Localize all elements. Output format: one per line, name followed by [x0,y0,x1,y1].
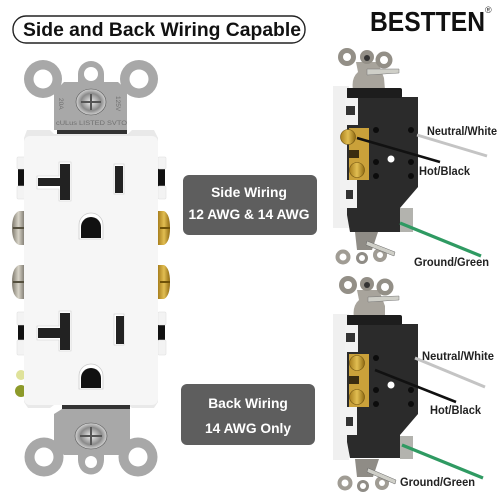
black body [340,315,418,458]
hot wire [375,370,456,402]
label: side wiring: 12 AWG & 14 AWG [189,207,309,222]
label: hot: Hot/Black [430,405,482,417]
brand logo: BESTTEN [370,6,485,37]
top mounting strap [24,60,158,135]
neutral wire [417,135,487,156]
label: ground: Ground/Green [400,477,475,489]
label: back wiring: 14 AWG Only [205,421,291,436]
green ground screw [15,370,27,397]
side wiring device [333,48,497,269]
front view outlet [12,60,170,476]
label: ground: Ground/Green [414,257,489,269]
label: back wiring: Back Wiring [208,396,288,411]
bottom mounting strap [24,405,158,476]
label: back wiring [181,384,315,445]
top bracket with screw [338,48,399,90]
upper receptacle slots [37,162,124,239]
top mounting strap: cULus LISTED SVTO [56,120,127,127]
top mounting strap: 125V [114,96,121,112]
brand logo: ® [485,5,492,15]
label: side wiring [183,175,317,235]
hot wire [357,138,440,162]
black body [340,88,418,232]
white housing strip [333,86,349,228]
lower receptacle slots [37,311,124,389]
brass terminal screws [158,211,170,299]
white housing strip [333,314,349,460]
lower bracket with screw [338,459,396,492]
brass terminals [340,128,369,180]
label: side wiring: Side Wiring [211,185,287,200]
lower bracket with screw [336,232,395,264]
label: neutral: Neutral/White [422,351,494,363]
title pill: Side and Back Wiring Capable [23,20,301,41]
label: neutral: Neutral/White [427,126,497,138]
ground wire [400,223,481,256]
top mounting strap: 20A [57,98,64,110]
label: hot: Hot/Black [419,166,471,178]
back wiring device [333,276,494,492]
brass terminals [349,354,369,407]
side tabs and terminals [12,157,170,397]
top bracket with screw [339,276,399,318]
ground plate [400,208,413,232]
ground plate [400,436,413,459]
ground wire [402,445,483,478]
neutral wire [415,358,485,387]
outlet face [24,130,158,408]
silver terminal screws [12,211,25,299]
